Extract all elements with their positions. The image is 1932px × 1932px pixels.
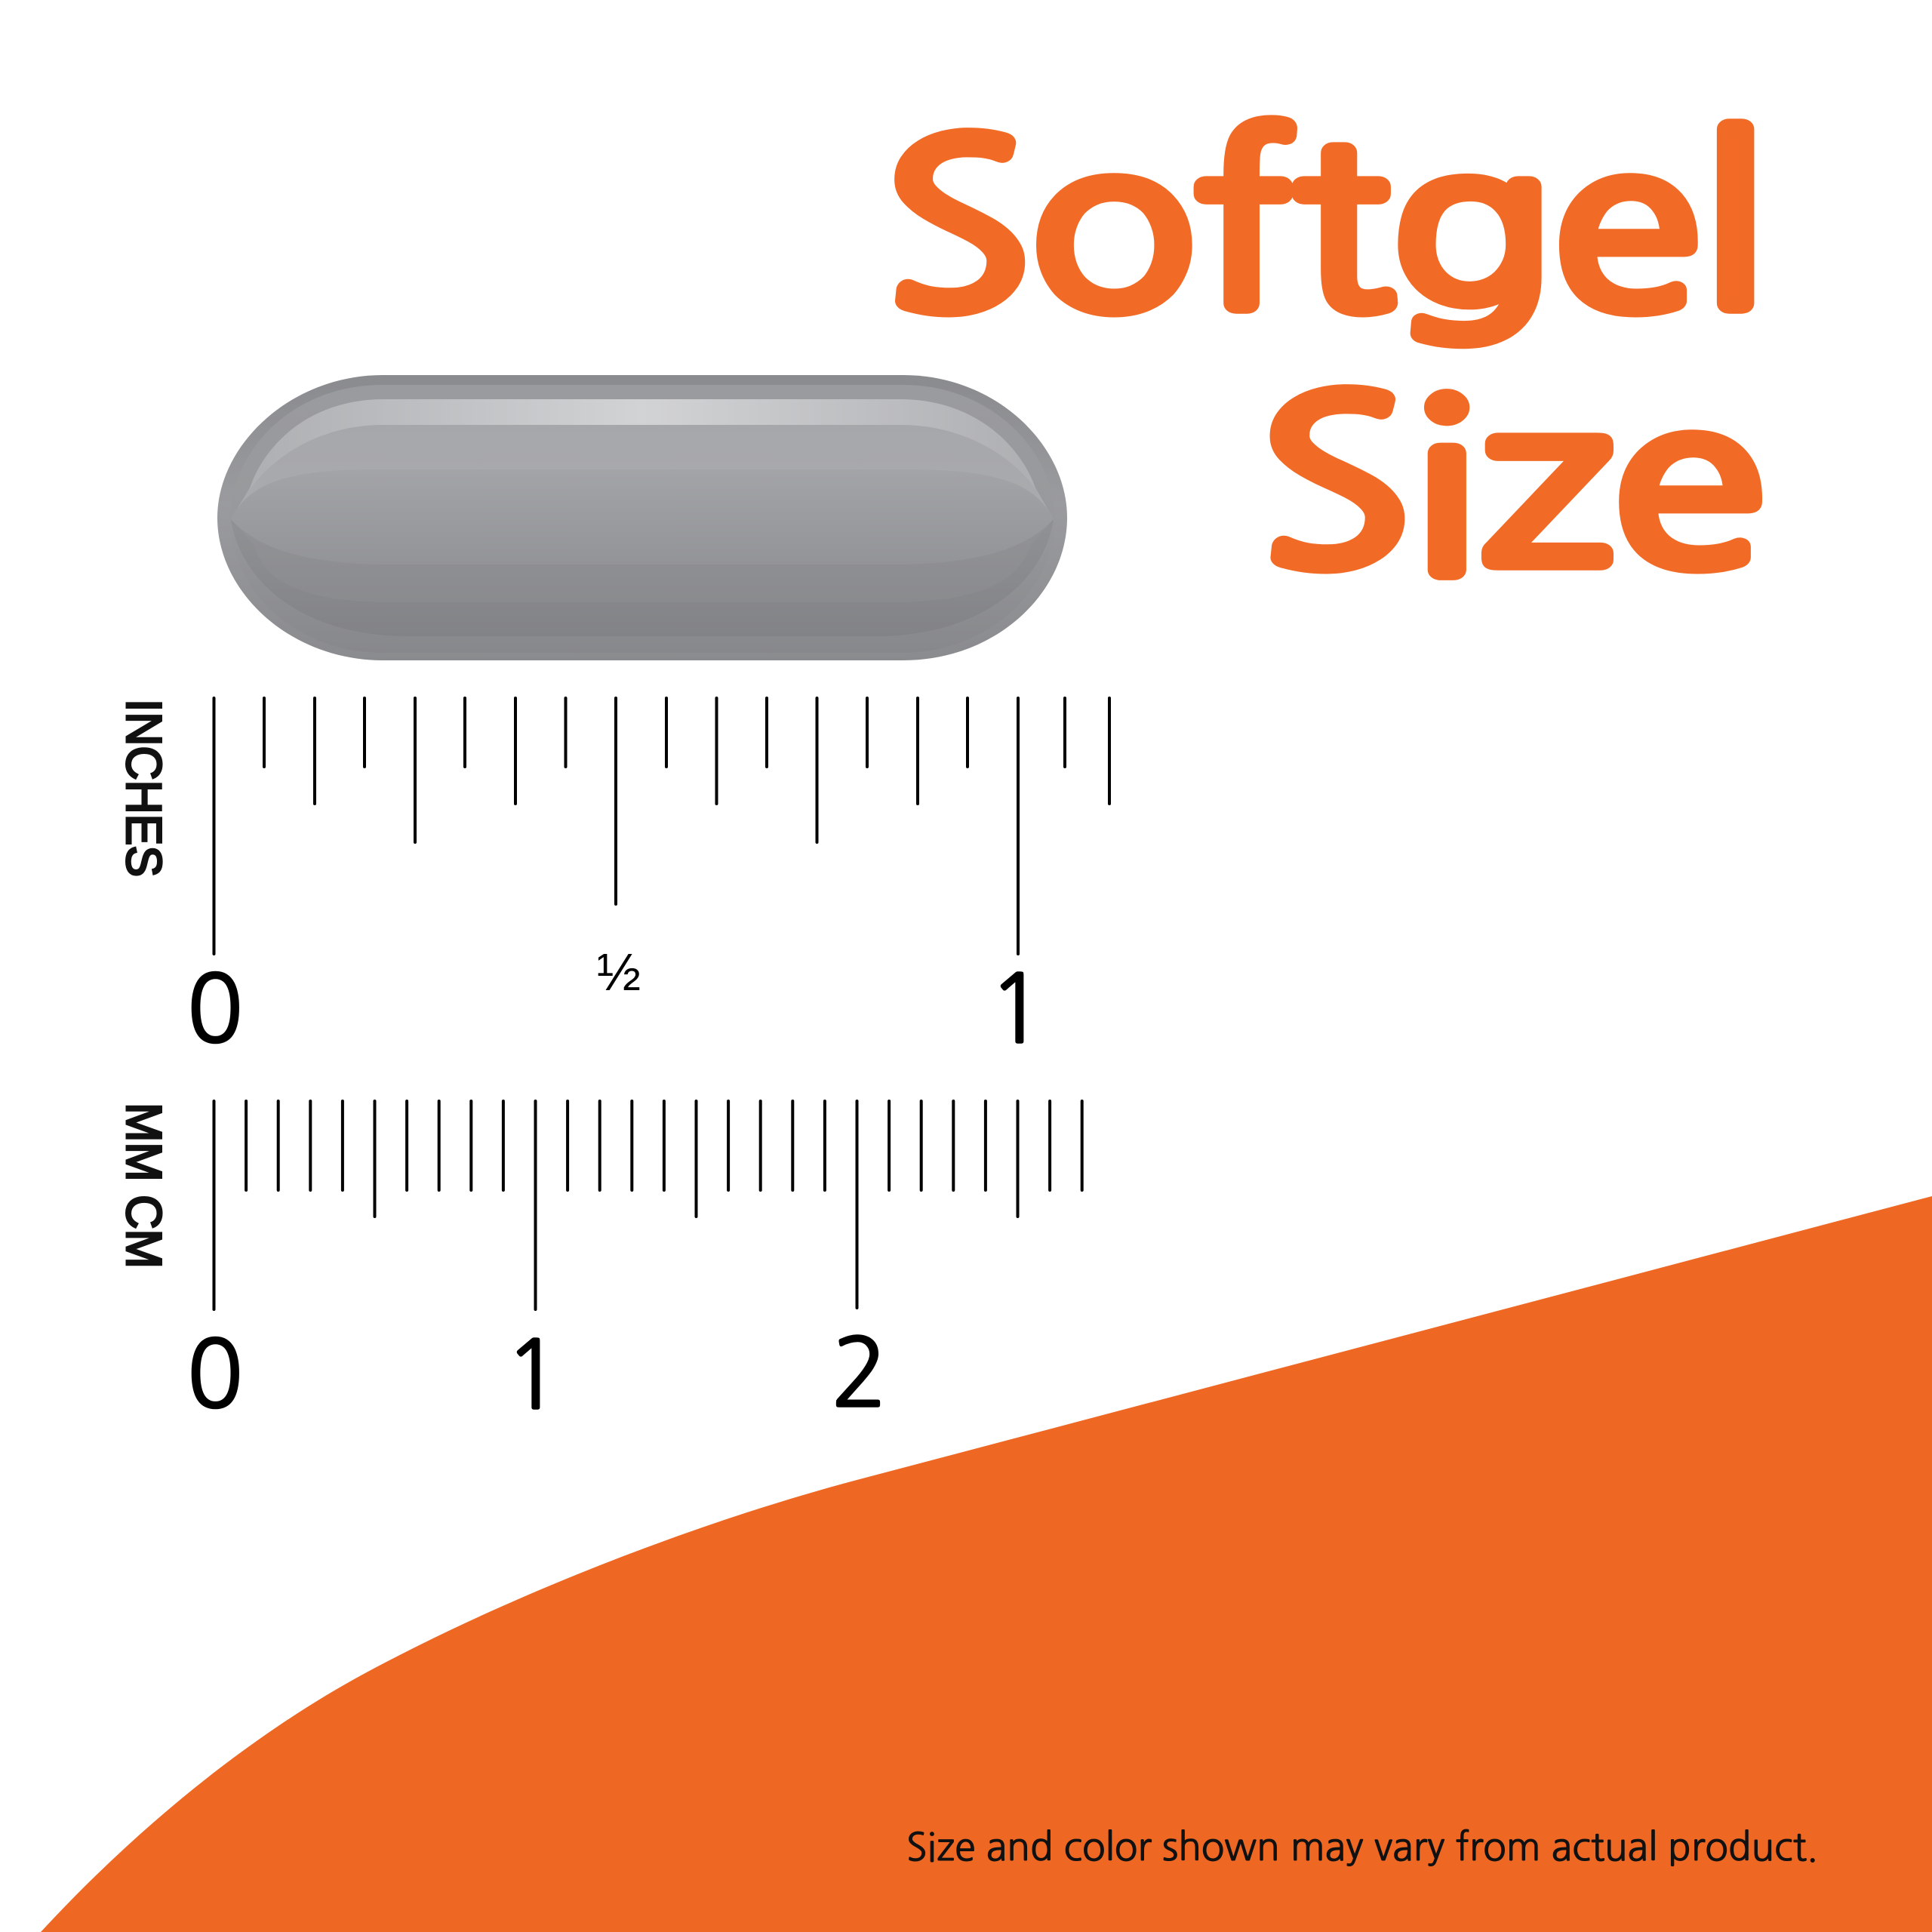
centimeter numerals: 2 [831, 1326, 888, 1420]
inches numerals: 0 [186, 962, 244, 1056]
centimeter and millimeter ruler [116, 1101, 1082, 1422]
capsule outer shell [217, 375, 1067, 660]
centimeter numerals: 0 [186, 1327, 244, 1421]
softgel capsule illustration [217, 375, 1067, 660]
orange corner shape [41, 1196, 1932, 1932]
title line 1: Softgel [884, 113, 1766, 342]
capsule lower mid band [231, 519, 1054, 602]
capsule highlight [249, 399, 1036, 491]
inches numerals [186, 962, 1045, 1056]
title line 2: Size [1260, 370, 1765, 596]
capsule lower shade band [231, 519, 1054, 636]
capsule inner rim [230, 385, 1055, 653]
inches label: INCHES [116, 699, 172, 877]
one half label: ½ [597, 943, 641, 1001]
capsule central lens [231, 469, 1054, 565]
mm cm label: MM CM [116, 1103, 172, 1269]
inches ruler [116, 698, 1109, 1056]
disclaimer text: Size and color shown may vary from actual product. [906, 1829, 1818, 1866]
inches tick marks [214, 698, 1109, 954]
millimeter tick marks [214, 1101, 1082, 1309]
title: Softgel Size [884, 113, 1766, 596]
centimeter numerals [186, 1326, 888, 1422]
centimeter numerals: 1 [504, 1328, 561, 1422]
inches numerals: 1 [988, 962, 1045, 1056]
capsule upper mid band [231, 423, 1054, 519]
